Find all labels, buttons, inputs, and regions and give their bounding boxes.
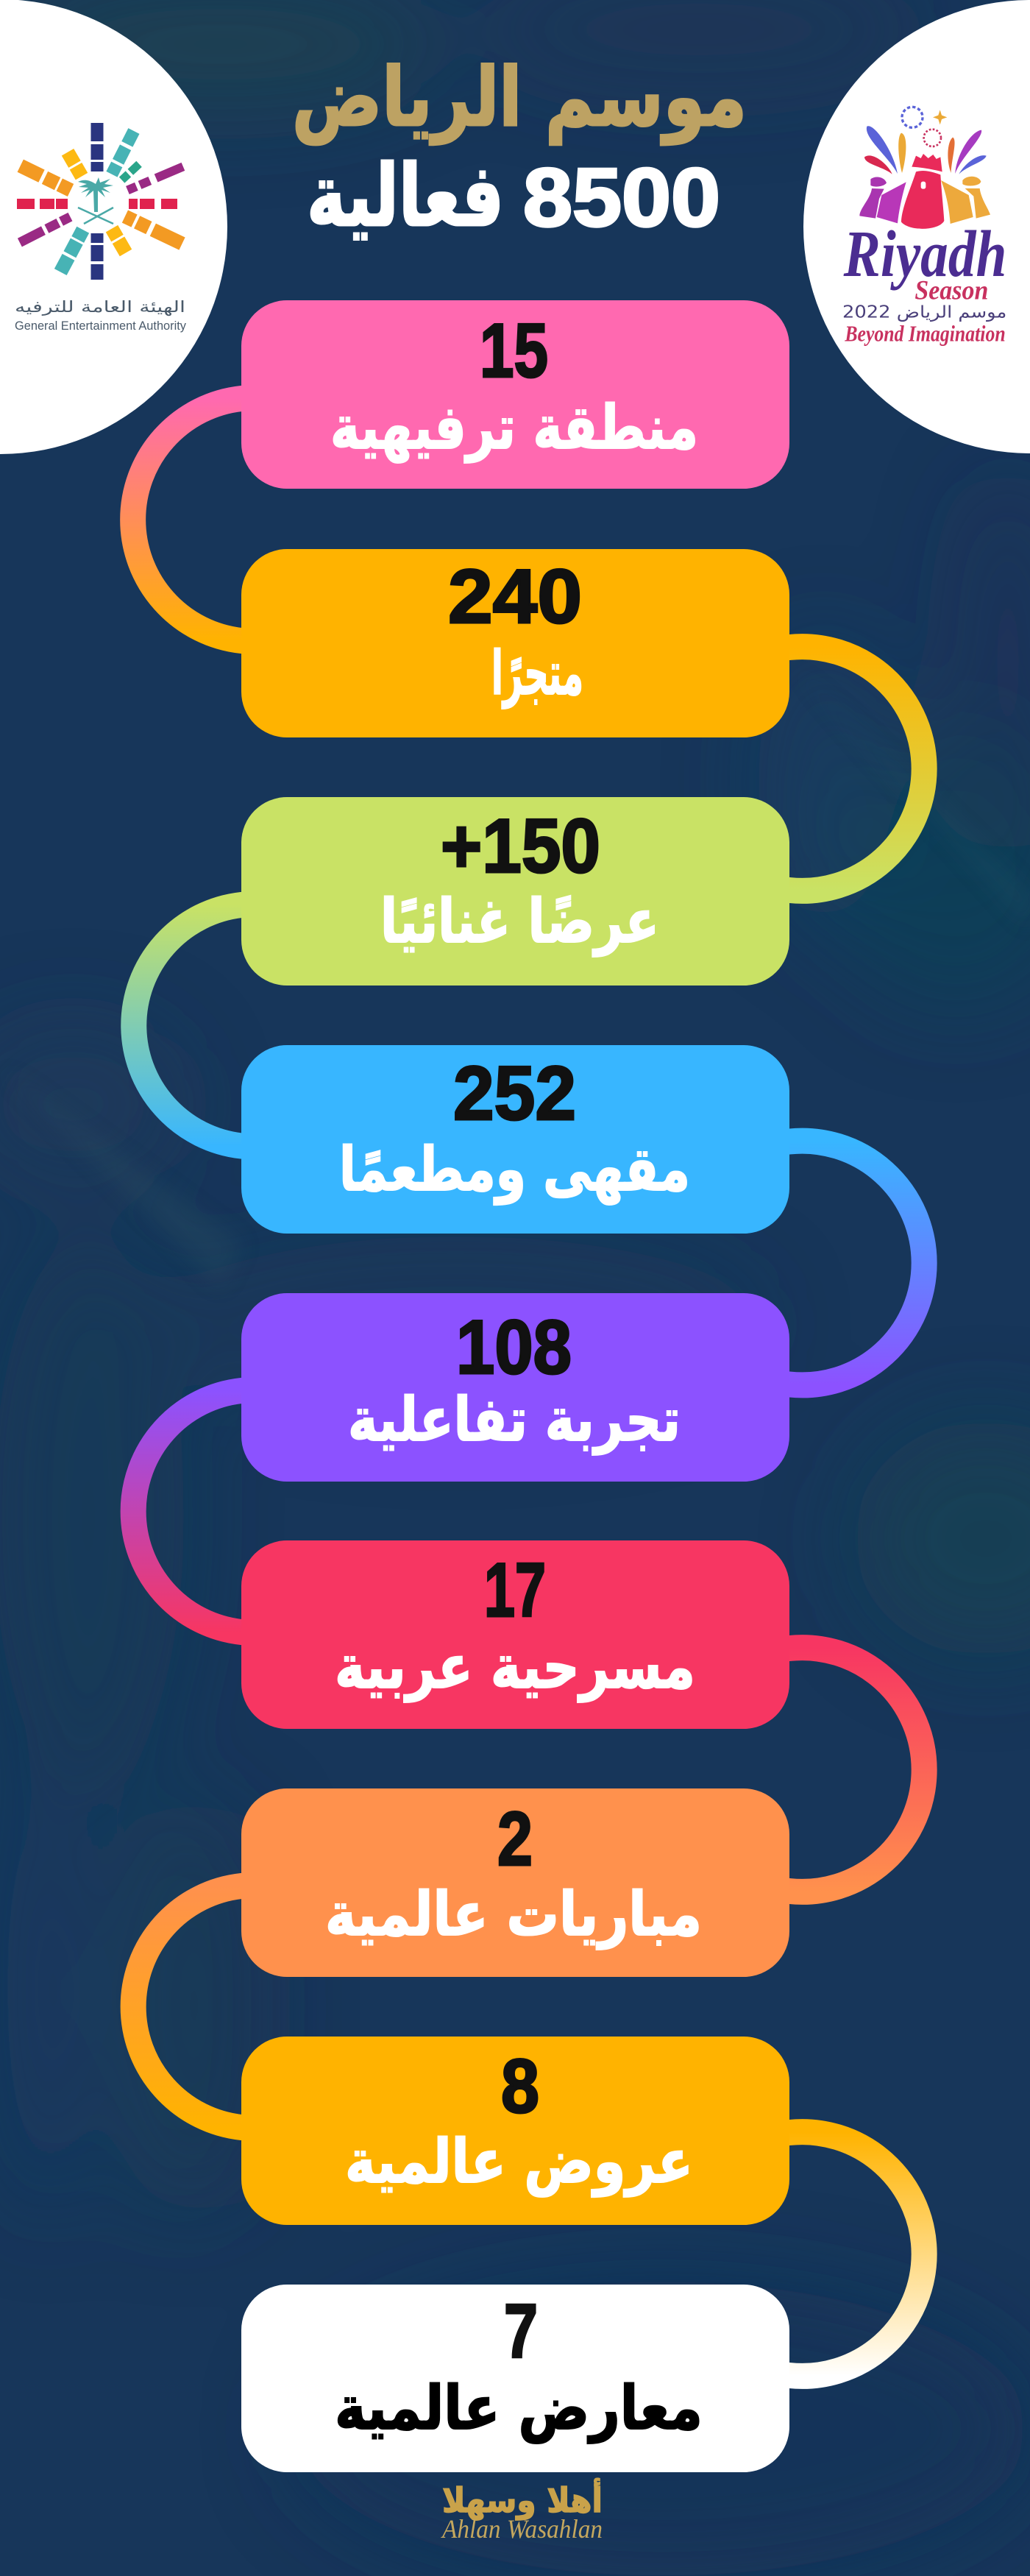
title [292,50,747,246]
logo: General Entertainment Authority [15,123,186,333]
panel: 252 cafes and restaurants [241,1045,789,1234]
panel: 8 world shows: عروض عالمية [345,2127,693,2198]
icon: palm and swords [78,177,113,224]
connector 8 [776,2132,924,2376]
icon: castle [859,154,990,229]
panel: 17 Arabic plays: مسرحية عربية [335,1632,695,1702]
Season wordmark: Season [914,275,988,305]
panel: 15 entertainment zones: 15 [480,308,548,394]
title line 1: موسم الرياض [292,50,747,145]
connector 4 [776,1141,924,1385]
connector 3 [134,905,254,1146]
logo: Ahlan Wasahlan: Ahlan Wasahlan [441,2514,603,2544]
logo: Riyadh Season [842,107,1006,346]
panel: 108 interactive experiences: 108 [456,1305,572,1390]
panel: 150+ concerts [241,797,789,986]
panel: 108 interactive experiences: تجربة تفاعلية [348,1385,681,1455]
logo: Ahlan Wasahlan [441,2478,603,2544]
panel: 240 stores: متجرًا [491,639,583,709]
logo english name: General Entertainment Authority [15,319,186,333]
left white circle [0,0,227,454]
right white circle [803,0,1030,453]
title line 2: فعالية [307,146,504,246]
panel: 2 world matches: 2 [497,1797,533,1882]
connector 2 [776,647,924,891]
panel: 150+ concerts: عرضًا غنائيًا [380,887,659,957]
panel: 240 stores [241,549,789,737]
panel: 17 Arabic plays [241,1540,789,1729]
panel: 240 stores: 240 [448,554,582,640]
logo: Ahlan Wasahlan: أهلا وسهلا [442,2478,603,2520]
panel: 7 world exhibitions [241,2285,789,2472]
panel: 252 cafes and restaurants: 252 [453,1051,576,1136]
logo arabic name: الهيئة العامة للترفيه [15,298,185,316]
icon: fireworks [864,107,987,174]
connector 7 [133,1886,254,2127]
connector 6 [776,1648,924,1892]
panel: 8 world shows: 8 [501,2044,539,2129]
panel: 15 entertainment zones: منطقة ترفيهية [330,393,698,463]
panel: 15 entertainment zones [241,300,789,489]
connector 5 [133,1391,254,1632]
connector 1 [133,399,254,640]
panel: 8 world shows [241,2037,789,2225]
panel: 150+ concerts: +150 [441,804,600,889]
panel: 108 interactive experiences [241,1293,789,1482]
panel: 2 world matches: مباريات عالمية [325,1880,702,1950]
panel: 252 cafes and restaurants: مقهى ومطعمًا [339,1135,690,1206]
panel: 7 world exhibitions: معارض عالمية [335,2374,703,2444]
title number: 8500 [523,152,720,244]
panel: 7 world exhibitions: 7 [504,2289,538,2374]
panel: 17 Arabic plays: 17 [484,1548,546,1633]
Arabic season name and year: موسم الرياض 2022 [842,303,1006,322]
panel: 2 world matches [241,1788,789,1977]
